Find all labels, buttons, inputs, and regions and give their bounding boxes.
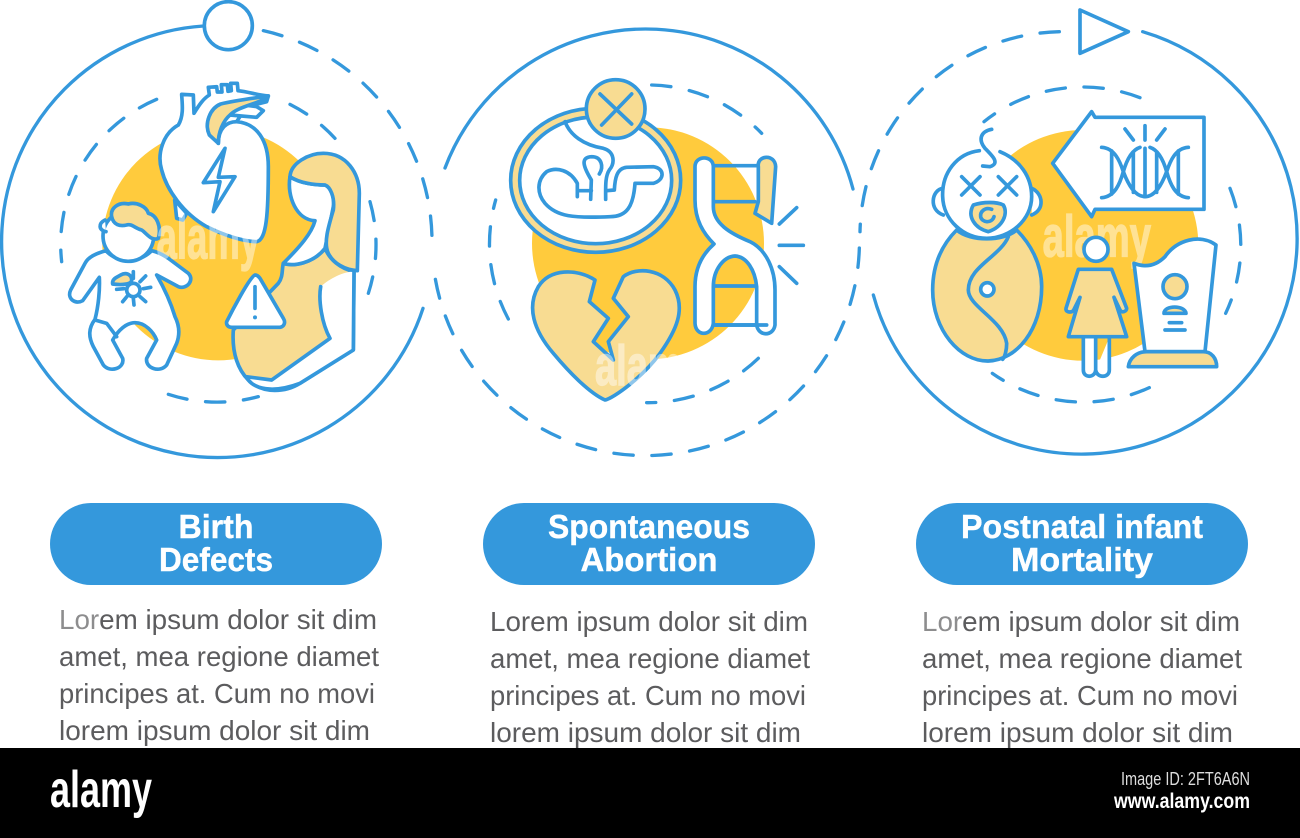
icon: heart with lightning bolt [160,83,268,242]
icon: broken heart [533,271,679,400]
pill heading: Postnatal infant Mortality: Mortality [1011,541,1154,578]
text block: column 3: principes at. Cum no movi [922,680,1238,711]
icon: swaddled baby [933,129,1042,361]
text block: column 3: Lorem ipsum dolor sit dim [922,606,1240,637]
text block: column 1: Lorem ipsum dolor sit dim [59,604,377,635]
outer orbit ring [2,26,432,458]
yellow background circle [102,128,334,360]
yellow background circle [968,130,1198,361]
text block: column 2: Lorem ipsum dolor sit dim [490,606,808,637]
icon: broken DNA strand [695,157,803,334]
pill heading: Spontaneous Abortion [483,503,815,585]
icon: fetus in womb [511,108,681,252]
pill heading: Birth Defects: Birth [178,508,254,545]
text block: column 1: principes at. Cum no movi [59,678,375,709]
footer bar [0,748,1300,838]
inner dashed ring [61,99,376,402]
website: www.alamy.com [1113,790,1250,813]
text block: column 2: amet, mea regione diamet [490,643,810,674]
inner dashed ring [489,85,762,403]
small orbit marker circle [204,2,252,50]
icon: girl [1066,237,1127,376]
pill heading: Spontaneous Abortion: Abortion [580,541,718,578]
icon: gravestone [1128,239,1217,367]
outer orbit ring [860,32,1297,454]
panel: postnatal infant mortality illustration [860,10,1297,454]
triangle orbit marker [1080,10,1128,53]
panel: birth defects illustration [2,2,432,458]
text block: column 2: lorem ipsum dolor sit dim [490,717,801,748]
icon: warning triangle [227,275,285,327]
text block: column 3: amet, mea regione diamet [922,643,1242,674]
pill heading: Birth Defects: Defects [159,541,273,578]
text block: column 3: lorem ipsum dolor sit dim [922,717,1233,748]
icon: cross circle [586,80,645,138]
text block: column 1: lorem ipsum dolor sit dim [59,715,370,746]
pill heading: Postnatal infant Mortality: Postnatal infant [961,508,1203,545]
panel: spontaneous abortion illustration [433,29,859,456]
outer orbit ring [433,29,859,456]
pill heading: Birth Defects [50,503,382,585]
alamy watermark: alamy [1043,205,1151,270]
image id: Image ID: 2FT6A6N [1121,769,1250,789]
pill heading: Spontaneous Abortion: Spontaneous [548,508,750,545]
alamy watermark: alam [595,335,682,398]
text block: column 1 [58,604,379,746]
inner dashed ring [984,87,1241,402]
footer logo: alamy [50,761,152,819]
icon: DNA arrow [1053,112,1204,217]
icon: pregnant woman [233,153,359,390]
text block: column 2 [490,606,810,748]
pill heading: Postnatal infant Mortality [916,503,1248,585]
text block: column 1: amet, mea regione diamet [59,641,379,672]
alamy watermark: alamy [157,204,260,271]
text block: column 2: principes at. Cum no movi [490,680,806,711]
yellow background circle [532,127,764,359]
text block: column 3 [921,606,1242,748]
icon: baby [70,203,191,369]
